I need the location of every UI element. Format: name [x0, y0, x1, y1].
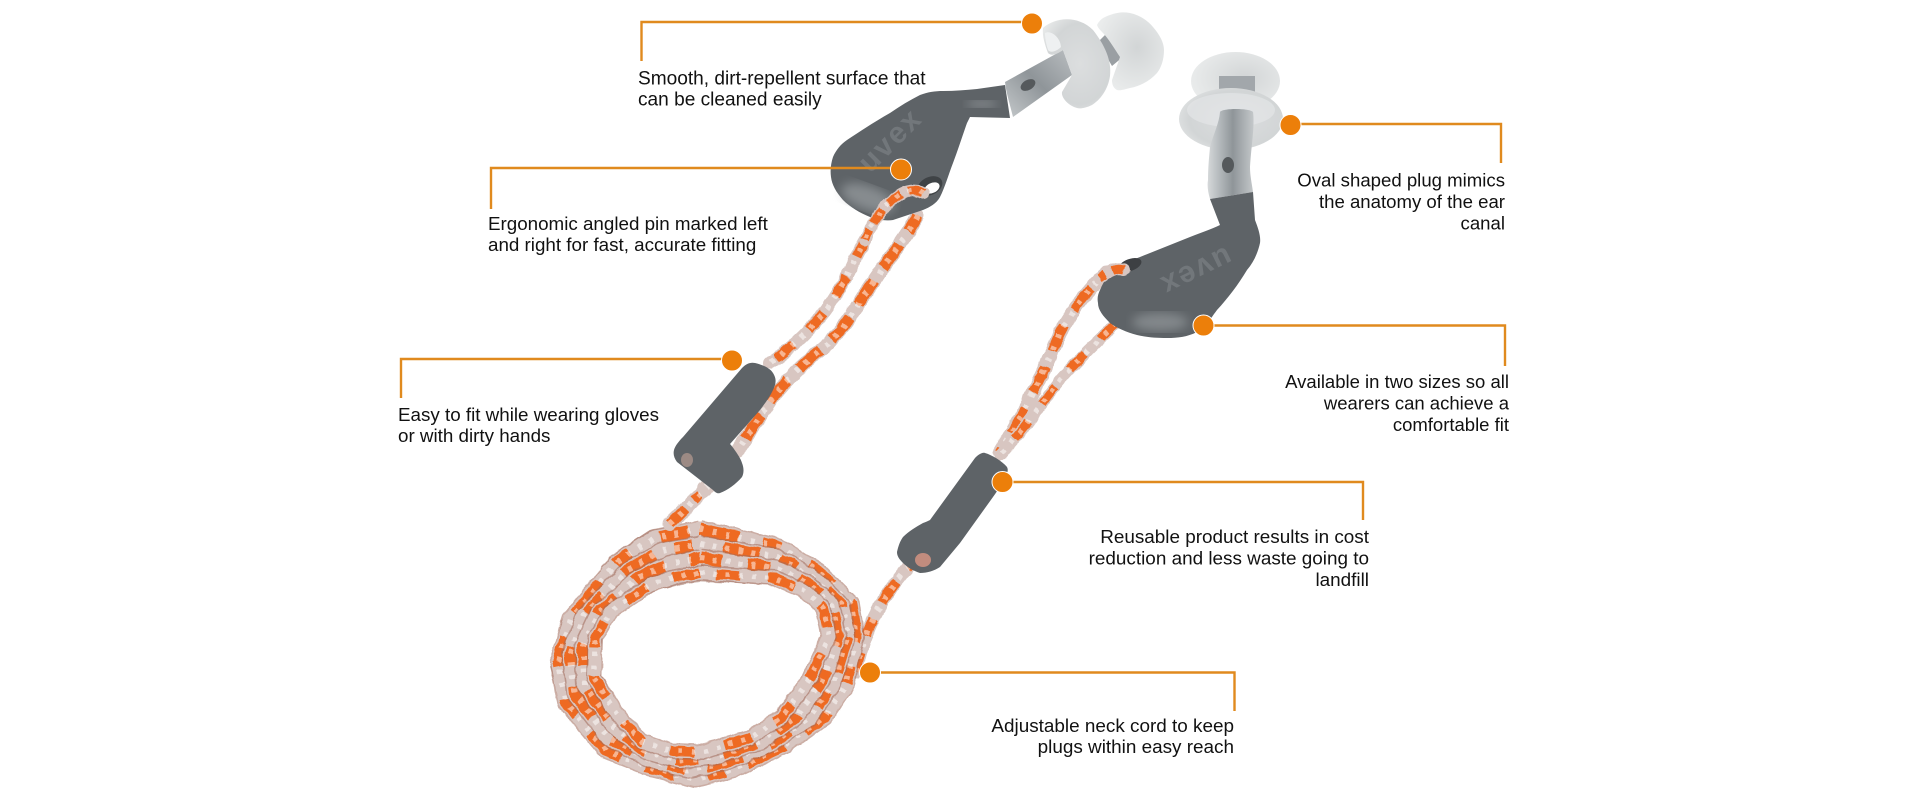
callout text: Easy to fit while wearing gloves	[398, 404, 659, 425]
cord from loop to left slider	[670, 482, 712, 524]
leader line	[401, 359, 732, 398]
marker dot	[722, 350, 742, 371]
callout: reusable	[992, 472, 1370, 591]
marker dot	[1022, 13, 1042, 34]
callout text: the anatomy of the ear	[1319, 191, 1505, 212]
leader line	[1291, 124, 1501, 163]
grey angled pin	[831, 85, 1010, 220]
leader line	[870, 672, 1234, 711]
plug tip	[1191, 52, 1280, 110]
callout text: or with dirty hands	[398, 425, 550, 446]
neck cord loop	[550, 522, 862, 785]
callout text: Ergonomic angled pin marked left	[488, 213, 768, 234]
leader line	[1003, 482, 1363, 520]
plug flange	[1043, 19, 1110, 108]
right earplug	[1098, 52, 1283, 338]
plug stem	[1208, 109, 1254, 199]
uvex marking: uvex	[852, 102, 929, 179]
left cord slider	[674, 363, 776, 493]
callout text: Adjustable neck cord to keep	[991, 716, 1234, 737]
callout text: Available in two sizes so all	[1285, 371, 1509, 392]
right cord strands	[1000, 273, 1116, 455]
plug neck	[1219, 76, 1255, 94]
callout: neck cord	[860, 662, 1234, 758]
leader line	[642, 22, 1032, 61]
callout text: landfill	[1315, 570, 1369, 591]
marker dot	[860, 662, 880, 683]
callout text: reduction and less waste going to	[1089, 548, 1369, 570]
grey angled pin	[1098, 192, 1260, 338]
callout: ergonomic pin	[488, 159, 912, 255]
plug tip	[1097, 12, 1164, 90]
callout: oval plug	[1280, 114, 1505, 234]
callout text: Oval shaped plug mimics	[1297, 170, 1505, 190]
callout text: wearers can achieve a	[1323, 392, 1510, 414]
callout text: plugs within easy reach	[1038, 737, 1234, 758]
callout: two sizes	[1193, 315, 1510, 435]
callout text: Reusable product results in cost	[1100, 527, 1369, 548]
plug stem	[1005, 50, 1072, 117]
left earplug cord through pin	[865, 190, 924, 240]
callout text: canal	[1461, 212, 1505, 234]
marker dot	[1280, 114, 1301, 136]
marker dot	[890, 159, 912, 180]
plug neck	[1098, 30, 1124, 66]
callout: easy to fit	[398, 350, 742, 446]
callout text: and right for fast, accurate fitting	[488, 234, 756, 255]
right earplug cord through pin	[1100, 269, 1124, 278]
plug flange	[1179, 88, 1283, 150]
callout text: can be cleaned easily	[638, 90, 822, 110]
marker dot	[992, 472, 1013, 492]
leader line	[491, 168, 900, 209]
left earplug	[831, 12, 1164, 220]
left cord strands behind the pin	[738, 216, 917, 450]
cord from loop to right slider	[856, 557, 917, 672]
right cord slider	[897, 453, 1008, 573]
leader line	[1204, 326, 1505, 366]
callout: smooth surface	[638, 13, 1042, 110]
callout text: comfortable fit	[1393, 414, 1509, 435]
uvex marking: uvex	[1154, 240, 1237, 303]
loop base band	[550, 522, 862, 785]
marker dot	[1193, 315, 1214, 336]
callout text: Smooth, dirt-repellent surface that	[638, 68, 926, 90]
